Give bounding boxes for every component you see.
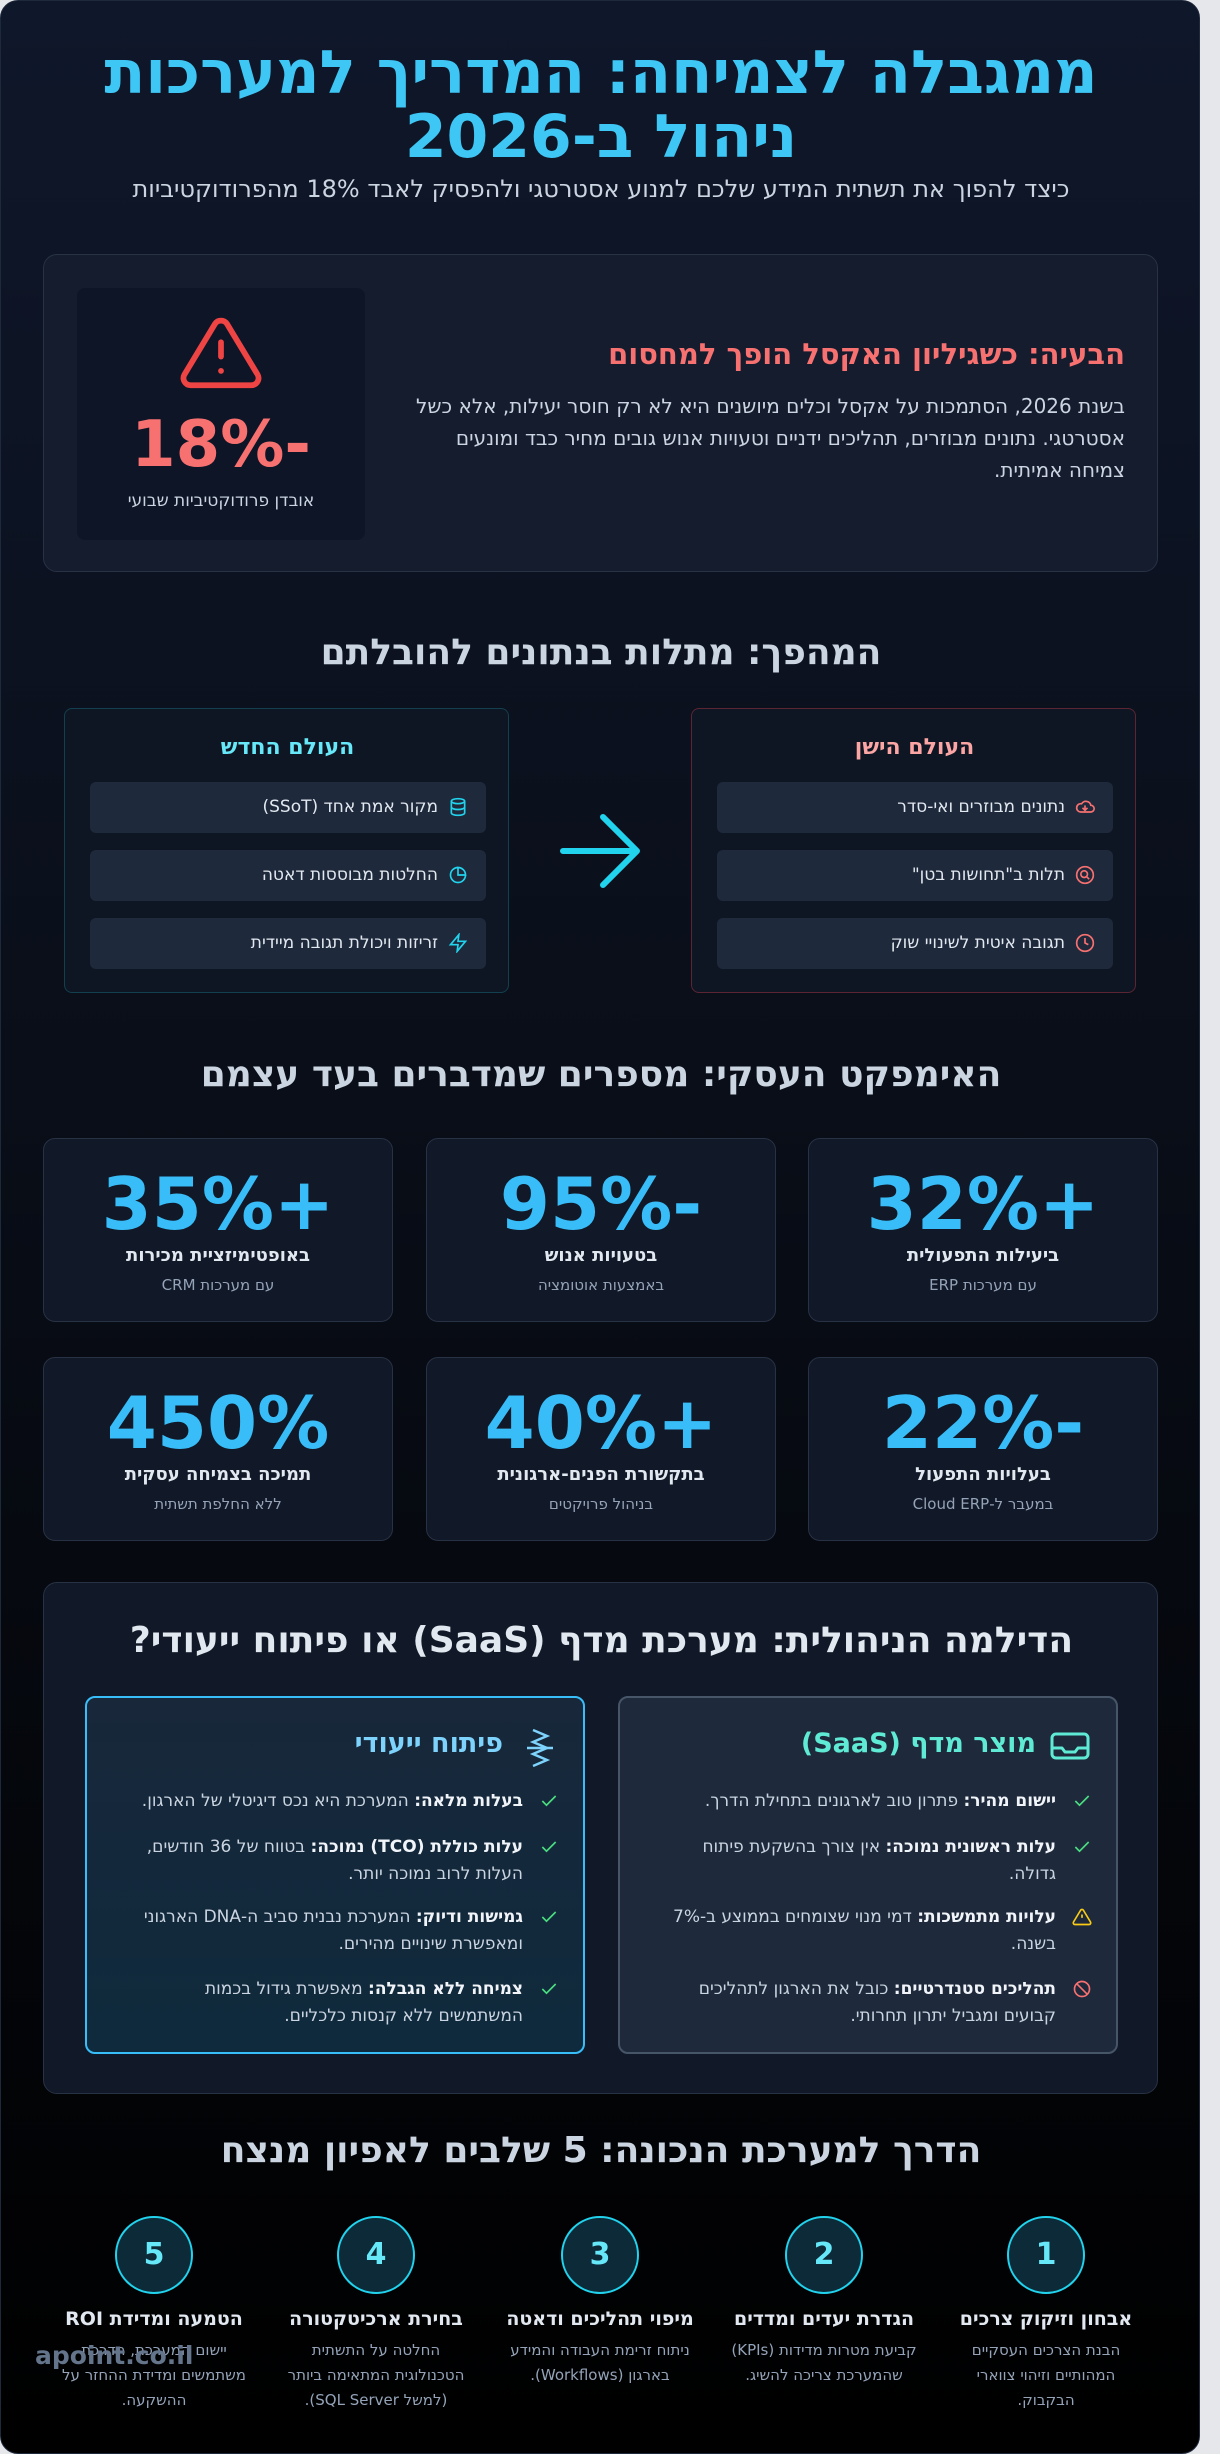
stat: communication: 40%+ bbox=[485, 1381, 717, 1465]
custom heading bbox=[355, 1728, 553, 1768]
step 1: הבנת הצרכים העסקיים המהותיים וזיהוי צווארי הבקבוק. bbox=[972, 2341, 1120, 2409]
option: SaaS bbox=[618, 1696, 1118, 2054]
number: 18%- bbox=[131, 408, 311, 482]
panel: new world bbox=[64, 708, 509, 993]
title: ממגבלה לצמיחה: המדריך למערכות bbox=[104, 38, 1098, 108]
stat: communication: בתקשורת הפנים-ארגונית bbox=[497, 1464, 705, 1485]
item: תלות ב"תחושות בטן" bbox=[912, 865, 1065, 885]
item bbox=[90, 782, 486, 833]
stat: errors: בטעויות אנוש bbox=[545, 1245, 657, 1266]
stat: errors: 95%- bbox=[500, 1162, 702, 1246]
stat: CRM: 35%+ bbox=[102, 1162, 334, 1246]
step 1: אבחון וזיקוק צרכים bbox=[960, 2308, 1132, 2330]
step 4 bbox=[288, 2216, 464, 2409]
stat: cloud: 22%- bbox=[882, 1381, 1084, 1465]
icon: warning bbox=[180, 318, 262, 388]
item: תגובה איטית לשינויי שוק bbox=[891, 933, 1065, 953]
stat: CRM: עם מערכות CRM bbox=[162, 1276, 274, 1294]
step 5: הטמעה ומדידת ROI bbox=[65, 2308, 243, 2330]
stat: growth: ללא החלפת תשתית bbox=[154, 1495, 282, 1513]
caption: אובדן פרודוקטיביות שבועי bbox=[128, 491, 314, 511]
panel: old world bbox=[691, 708, 1136, 993]
stat: growth: תמיכה בצמיחה עסקית bbox=[125, 1464, 311, 1485]
item: צמיחה ללא הגבלה: מאפשרת גידול בכמות המשתמשים ללא קנסות כלכליים. bbox=[205, 1979, 523, 2026]
item: יישום מהיר: פתרון טוב לארגונים בתחילת הדרך. bbox=[705, 1791, 1056, 1811]
item: מקור אמת אחד (SSoT) bbox=[262, 797, 438, 817]
step 4: החלטה על התשתית הטכנולוגית המתאימה ביותר (למשל SQL Server). bbox=[288, 2341, 464, 2409]
stat: growth: 450% bbox=[107, 1381, 329, 1465]
heading: revolution: המהפך: מתלות בנתונים להובלתם bbox=[321, 632, 881, 673]
stat: cloud: בעלויות התפעול bbox=[915, 1464, 1051, 1485]
step 1 bbox=[960, 2216, 1132, 2409]
item: זריזות ויכולת תגובה מיידית bbox=[251, 933, 438, 953]
stat: ERP: ביעילות התפעולית bbox=[907, 1245, 1059, 1266]
stat: growth bbox=[43, 1357, 393, 1541]
custom heading: פיתוח ייעודי bbox=[355, 1728, 503, 1759]
problem text: בשנת 2026, הסתמכות על אקסל וכלים מיושנים היא לא רק חוסר יעילות, אלא כשל אסטרטגי. נתונים מבוזרים, תהליכים ידניים וטעויות אנוש גובים מחיר כבד ומונעים צמיחה אמיתית. bbox=[416, 394, 1125, 482]
title bbox=[104, 38, 1098, 172]
stat: cloud bbox=[808, 1357, 1158, 1541]
panel: problem bbox=[43, 254, 1158, 572]
item: נתונים מבוזרים ואי-סדר bbox=[897, 797, 1065, 817]
step 4: 4 bbox=[366, 2237, 386, 2272]
heading: impact: האימפקט העסקי: מספרים שמדברים בעד עצמם bbox=[201, 1054, 1001, 1095]
saas heading: מוצר מדף (SaaS) bbox=[801, 1728, 1036, 1759]
stat box: productivity loss bbox=[77, 288, 365, 540]
step 2: הגדרת יעדים ומדדים bbox=[734, 2308, 914, 2330]
item: עלות כוללת (TCO) נמוכה: בטווח של 36 חודשים, העלות לרוב נמוכה יותר. bbox=[147, 1837, 523, 1884]
item: עלות ראשונית נמוכה: אין צורך בהשקעת פיתוח גדולה. bbox=[702, 1837, 1056, 1884]
step 2: 2 bbox=[814, 2237, 834, 2272]
step 3 bbox=[506, 2216, 694, 2384]
stat: communication bbox=[426, 1357, 776, 1541]
step 5 bbox=[62, 2216, 246, 2409]
step 5: יישום המערכת, הדרכת משתמשים ומדידת ההחזר על ההשקעה. bbox=[62, 2341, 246, 2409]
heading old: העולם הישן bbox=[855, 735, 974, 760]
item bbox=[90, 918, 486, 969]
step 2 bbox=[731, 2216, 917, 2384]
option: custom bbox=[85, 1696, 585, 2054]
item: גמישות ודיוק: המערכת נבנית סביב ה-DNA הארגוני ומאפשרת שינויים מהירים. bbox=[144, 1907, 523, 1954]
stat: cloud: במעבר ל-Cloud ERP bbox=[913, 1495, 1053, 1513]
subtitle: כיצד להפוך את תשתית המידע שלכם למנוע אסטרטגי ולהפסיק לאבד 18% מהפרודוקטיביות bbox=[132, 175, 1070, 203]
step 4: בחירת ארכיטקטורה bbox=[289, 2308, 463, 2330]
step 5: 5 bbox=[144, 2237, 164, 2272]
item: החלטות מבוססות דאטה bbox=[262, 865, 438, 885]
step 2: קביעת מטרות מדידות (KPIs) שהמערכת צריכה להשיג. bbox=[731, 2341, 917, 2384]
panel: dilemma bbox=[43, 1582, 1158, 2094]
problem heading: הבעיה: כשגיליון האקסל הופך למחסום bbox=[608, 337, 1125, 371]
stat: communication: בניהול פרויקטים bbox=[549, 1495, 653, 1513]
item bbox=[90, 850, 486, 901]
dilemma heading: הדילמה הניהולית: מערכת מדף (SaaS) או פיתוח ייעודי? bbox=[130, 1620, 1073, 1661]
title: ניהול ב-2026 bbox=[405, 102, 797, 172]
stat: errors bbox=[426, 1138, 776, 1322]
stat: ERP: עם מערכות ERP bbox=[929, 1276, 1037, 1294]
stat: CRM bbox=[43, 1138, 393, 1322]
stat: CRM: באופטימיזציית מכירות bbox=[126, 1245, 310, 1266]
step 3: 3 bbox=[590, 2237, 610, 2272]
step 3: ניתוח זרימת העבודה והמידע בארגון (Workflows). bbox=[510, 2341, 690, 2384]
arrow bbox=[560, 814, 640, 888]
heading new: העולם החדש bbox=[221, 735, 354, 760]
item: בעלות מלאה: המערכת היא נכס דיגיטלי של הארגון. bbox=[142, 1791, 523, 1811]
step 3: מיפוי תהליכים ודאטה bbox=[506, 2308, 694, 2330]
stat: ERP bbox=[808, 1138, 1158, 1322]
stat: ERP: 32%+ bbox=[867, 1162, 1099, 1246]
item: תהליכים סטנדרטיים: כובל את הארגון לתהליכים קבועים ומגביל יתרון תחרותי. bbox=[699, 1979, 1056, 2026]
item bbox=[717, 782, 1113, 833]
item bbox=[717, 850, 1113, 901]
item: עלויות מתמשכות: דמי מנוי שצומחים בממוצע ב-7% בשנה. bbox=[673, 1907, 1056, 1954]
item bbox=[717, 918, 1113, 969]
heading: steps: הדרך למערכת הנכונה: 5 שלבים לאפיון מנצח bbox=[221, 2130, 981, 2171]
step 1: 1 bbox=[1036, 2237, 1056, 2272]
watermark: apoint.co.il bbox=[35, 2341, 193, 2370]
stat: errors: באמצעות אוטומציה bbox=[538, 1276, 664, 1294]
